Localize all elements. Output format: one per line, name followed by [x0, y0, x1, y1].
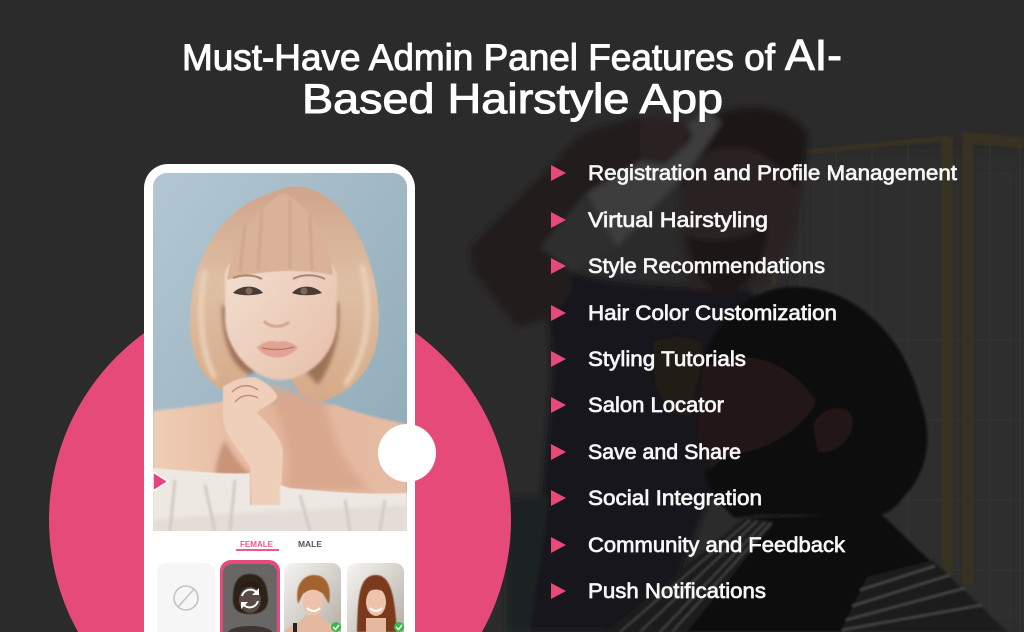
hand [223, 377, 283, 510]
item 7: Save and Share [588, 441, 741, 464]
window grid [908, 146, 1020, 150]
lips [257, 341, 298, 358]
eyes [233, 287, 322, 295]
item 4: Hair Color Customization [588, 302, 837, 325]
item 2: Virtual Hairstyling [588, 209, 768, 232]
check badge [394, 622, 404, 632]
portrait photo [153, 173, 407, 531]
title: AI- [785, 31, 842, 80]
item 9: Community and Feedback [588, 534, 846, 557]
background: darkened salon photo [470, 105, 1024, 632]
item 6: Salon Locator [588, 394, 724, 417]
item 10: Push Notifications [588, 580, 766, 603]
gender tabs [236, 540, 323, 551]
phone mockup [144, 164, 415, 632]
item 3: Style Recommendations [588, 255, 825, 278]
white off-shoulder top [153, 468, 407, 531]
white round button [378, 424, 436, 482]
gender tabs: FEMALE [240, 540, 274, 549]
title: Must-Have Admin Panel Features of [182, 37, 776, 78]
item 8: Social Integration [588, 487, 762, 510]
small play marker on photo edge [153, 472, 168, 491]
client silhouette [605, 287, 1007, 632]
salon folding screens [774, 138, 1024, 585]
title: Based Hairstyle App [302, 75, 723, 122]
thumbnail: none [157, 563, 215, 632]
barber silhouette [470, 107, 808, 632]
feature list [551, 162, 957, 603]
item 5: Styling Tutorials [588, 348, 746, 371]
thumbnail: short auburn hair [284, 563, 341, 632]
thumbnail: long brown hair [347, 563, 404, 632]
item 1: Registration and Profile Management [588, 162, 957, 185]
check badge [331, 622, 341, 632]
pink circle behind phone [49, 289, 511, 632]
thumbnail: selected [220, 560, 280, 632]
title [182, 31, 842, 122]
gender tabs: MALE [298, 540, 323, 549]
